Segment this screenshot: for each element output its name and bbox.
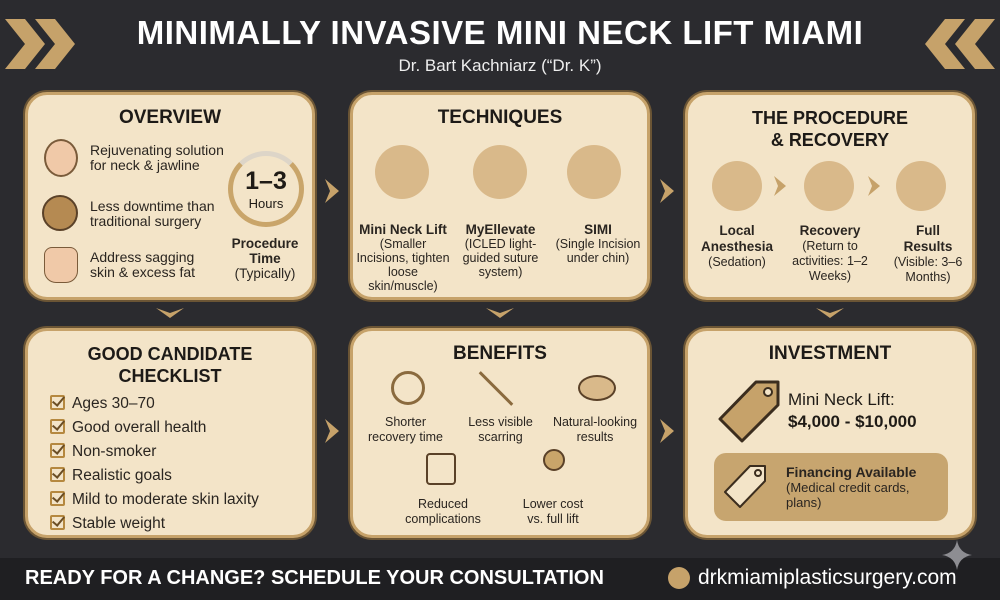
benefit 3 <box>553 415 637 444</box>
panel: procedure & recovery: THE PROCEDURE <box>752 108 908 128</box>
checklist: Non-smoker <box>72 443 156 460</box>
icon: recovery bed <box>804 161 854 211</box>
financing box: (Medical credit cards, <box>786 480 910 495</box>
panel: benefits: BENEFITS <box>453 343 547 364</box>
icon: simi <box>567 145 621 199</box>
icon: torso <box>44 247 78 283</box>
panel: benefits <box>350 328 650 538</box>
panel: overview: OVERVIEW <box>119 107 221 128</box>
financing box <box>714 453 948 521</box>
step 1: Local <box>719 223 755 238</box>
arrow <box>660 179 674 203</box>
benefit 2: scarring <box>478 430 523 444</box>
overview item 3: skin & excess fat <box>90 264 195 280</box>
panel: overview <box>25 92 315 300</box>
website: drkmiamiplasticsurgery.com <box>698 566 957 589</box>
technique 3: SIMI <box>584 222 612 237</box>
price: $4,000 - $10,000 <box>788 412 917 431</box>
technique 3 <box>556 222 640 265</box>
step 2: Recovery <box>800 223 860 238</box>
checklist <box>50 395 259 532</box>
panel: techniques <box>350 92 650 300</box>
panel: overview: 1–3 <box>245 167 287 195</box>
icon: clock <box>391 371 425 405</box>
decorative chevrons left <box>5 19 75 69</box>
checklist: Ages 30–70 <box>72 395 155 412</box>
panel: overview: Hours <box>249 196 283 211</box>
panel: investment <box>685 328 975 538</box>
icon: mini neck lift <box>375 145 429 199</box>
technique 1: Mini Neck Lift <box>359 222 447 237</box>
step 3 <box>894 223 962 284</box>
procedure time label: Time <box>249 251 281 266</box>
icon: myellevate <box>473 145 527 199</box>
step 1 <box>701 223 774 269</box>
checklist: Realistic goals <box>72 467 172 484</box>
overview item 1: Rejuvenating solution <box>90 142 224 158</box>
footer band <box>0 558 1000 600</box>
benefit 5: vs. full lift <box>527 512 579 526</box>
technique 3: (Single Incision under chin) <box>556 237 640 265</box>
benefit 4: Reduced <box>418 497 468 511</box>
arrow down <box>156 308 184 318</box>
panel: techniques: TECHNIQUES <box>438 107 562 128</box>
overview item 3: Address sagging <box>90 249 194 265</box>
checklist: Mild to moderate skin laxity <box>72 491 259 508</box>
icon: syringe <box>712 161 762 211</box>
icon: coin hand <box>543 449 565 471</box>
benefit 5: Lower cost <box>523 497 583 511</box>
panel: procedure & recovery: & RECOVERY <box>771 130 889 150</box>
step 3: (Visible: 3–6 Months) <box>894 255 962 284</box>
benefit 4 <box>405 497 481 526</box>
icon: eye <box>578 375 616 401</box>
price: Mini Neck Lift: <box>788 390 895 409</box>
financing box: plans) <box>786 495 821 510</box>
overview item 3 <box>90 249 195 280</box>
overview item 2: traditional surgery <box>90 213 201 229</box>
panel: good candidate checklist: GOOD CANDIDATE <box>88 344 252 364</box>
checklist: Good overall health <box>72 419 206 436</box>
icon: price tag <box>718 380 780 443</box>
price <box>788 390 917 431</box>
panel: good candidate checklist: CHECKLIST <box>118 366 222 386</box>
title: MINIMALLY INVASIVE MINI NECK LIFT MIAMI <box>137 14 863 51</box>
icon: phone <box>668 567 690 589</box>
overview item 2 <box>90 198 215 229</box>
step 1: Anesthesia <box>701 239 773 254</box>
arrow <box>325 179 339 203</box>
benefit 1 <box>368 415 443 444</box>
icon: clock <box>42 195 78 231</box>
arrow down <box>486 308 514 318</box>
checklist: Stable weight <box>72 515 165 532</box>
step 3: Results <box>904 239 952 254</box>
procedure time label <box>232 236 298 281</box>
step 2: (Return to activities: 1–2 Weeks) <box>792 239 868 283</box>
technique 2: MyEllevate <box>466 222 535 237</box>
arrow <box>660 419 674 443</box>
decorative chevrons right <box>925 19 995 69</box>
benefit 2: Less visible <box>468 415 533 429</box>
benefit 1: Shorter <box>385 415 426 429</box>
panel: investment: INVESTMENT <box>769 343 891 364</box>
technique 1: (Smaller Incisions, tighten loose skin/muscle) <box>356 237 450 293</box>
overview item 2: Less downtime than <box>90 198 215 214</box>
technique 2: (ICLED light-guided suture system) <box>463 237 538 279</box>
benefit 1: recovery time <box>368 430 443 444</box>
icon: calendar <box>426 453 456 485</box>
icon: face <box>44 139 78 177</box>
benefit 3: Natural-looking <box>553 415 637 429</box>
icon: people <box>896 161 946 211</box>
step 1: (Sedation) <box>708 255 766 269</box>
overview item 1: for neck & jawline <box>90 157 200 173</box>
icon: sparkle <box>942 540 972 570</box>
benefit 5 <box>523 497 584 526</box>
benefit 3: results <box>577 430 613 444</box>
arrow down <box>816 308 844 318</box>
panel: good candidate checklist <box>25 328 315 538</box>
ring: 1-3 hours <box>228 151 304 227</box>
overview item 1 <box>90 142 224 173</box>
benefit 4: complications <box>405 512 481 526</box>
procedure time label: Procedure <box>232 236 298 251</box>
arrow <box>325 419 339 443</box>
subtitle: Dr. Bart Kachniarz (“Dr. K”) <box>398 56 602 75</box>
financing box: Financing Available <box>786 464 916 480</box>
footer cta: READY FOR A CHANGE? SCHEDULE YOUR CONSULTATION <box>25 567 604 589</box>
panel: procedure & recovery <box>685 92 975 300</box>
procedure time label: (Typically) <box>235 266 295 281</box>
benefit 2 <box>468 415 533 444</box>
icon: scar <box>479 371 513 406</box>
step 3: Full <box>916 223 940 238</box>
